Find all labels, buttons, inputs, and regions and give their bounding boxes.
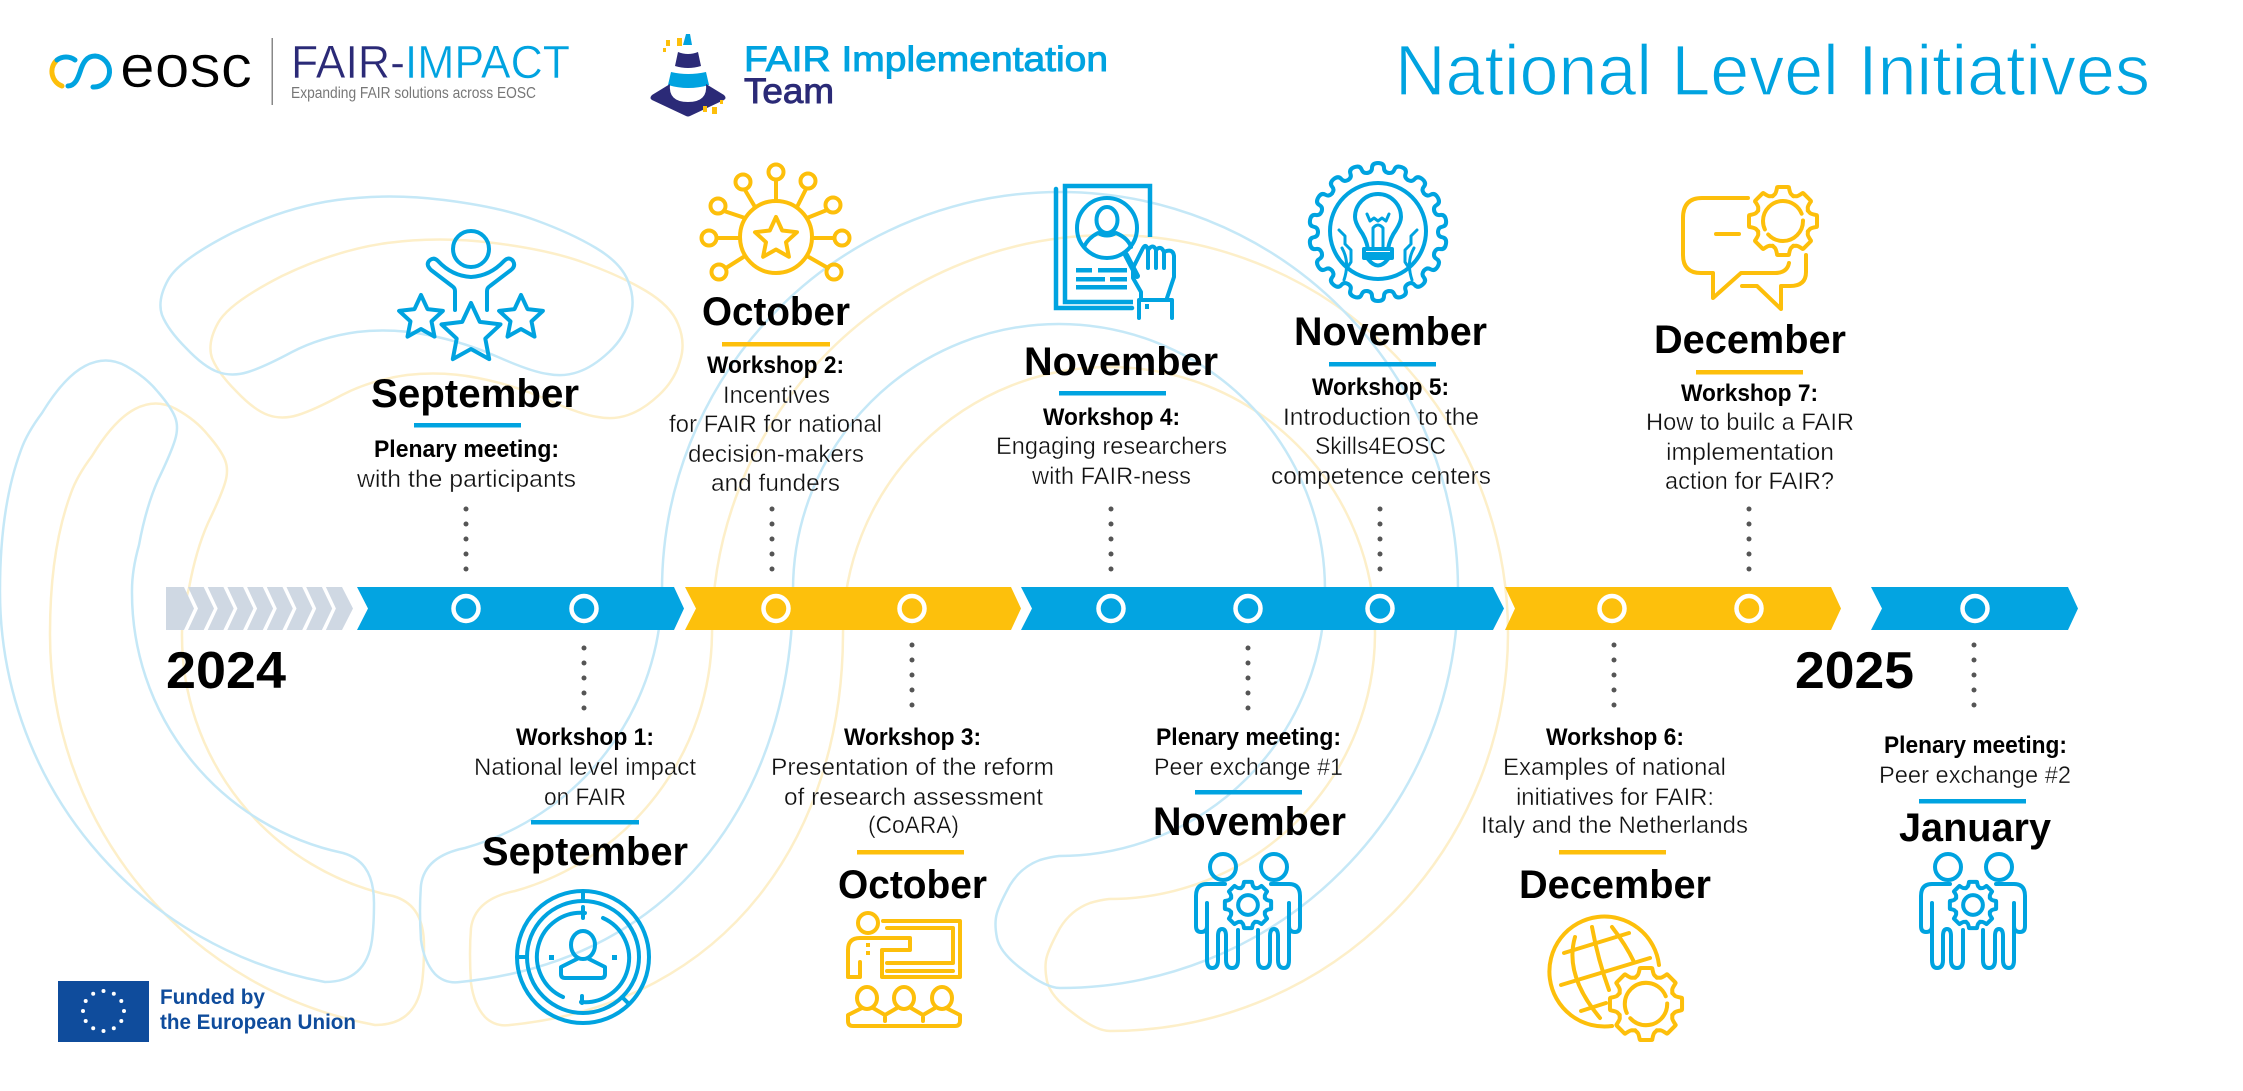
description: for FAIR for national [669, 411, 882, 438]
icon: profile document with hand [1056, 186, 1174, 318]
underline [531, 820, 639, 824]
heading: September: September [482, 830, 688, 874]
label: Workshop 7: [1681, 380, 1818, 407]
underline [1195, 790, 1302, 794]
label: Workshop 6: [1546, 724, 1684, 751]
connector dots [1108, 506, 1114, 572]
description: Examples of national [1503, 754, 1726, 781]
heading: FAIR Implementation: FAIR Implementation [744, 40, 1108, 79]
connector dots [1246, 646, 1250, 710]
underline [722, 342, 830, 346]
underline [1059, 391, 1166, 396]
description: implementation [1666, 439, 1834, 466]
icon: target person [517, 891, 649, 1023]
connector dots [582, 646, 586, 710]
milestone markers [454, 596, 1988, 621]
description: Presentation of the reform [771, 754, 1054, 781]
description: action for FAIR? [1665, 468, 1834, 495]
connector dots [1972, 642, 1976, 708]
wordmark: eosc: eosc [120, 33, 252, 100]
logo: FAIR Implementation Team [650, 34, 1108, 116]
description: of research assessment [784, 784, 1043, 811]
panel: Workshop 1, September [474, 646, 696, 1023]
description [996, 433, 1227, 490]
heading: Team: Team [744, 72, 834, 111]
divider between logos [272, 38, 273, 105]
logo: EOSC [52, 33, 252, 100]
segment: September [357, 587, 684, 630]
description: Incentives [723, 382, 830, 409]
panel: Workshop 7, December [1646, 187, 1854, 572]
description [474, 754, 696, 811]
description [669, 382, 882, 497]
segment: October [685, 587, 1021, 630]
icon: two people with gear [1196, 854, 1300, 968]
description: Skills4EOSC [1315, 433, 1446, 460]
year: 2025: 2025 [1795, 642, 1914, 700]
panel: Workshop 2, October [669, 164, 882, 572]
description: Peer exchange #1 [1154, 754, 1343, 781]
description: Introduction to the [1283, 404, 1479, 431]
description: competence centers [1271, 463, 1491, 490]
panel: Plenary meeting, January [1879, 642, 2071, 968]
icon: star hub [702, 164, 850, 280]
description: How to builc a FAIR [1646, 409, 1854, 436]
label: Workshop 4: [1043, 404, 1180, 431]
connector dots [1378, 506, 1382, 572]
segment: November [1021, 587, 1504, 630]
underline [414, 423, 521, 428]
description: with FAIR-ness [1031, 463, 1191, 490]
underline [1696, 370, 1803, 374]
wordmark: FAIR-IMPACT: FAIR-IMPACT [291, 36, 570, 88]
icon: chat bubbles with gear [1683, 187, 1817, 309]
icon: person with stars [399, 231, 543, 359]
panel: September plenary meeting [356, 231, 579, 572]
heading: October: October [838, 863, 987, 907]
title: National Level Initiatives [1395, 32, 2150, 111]
timeline bar [166, 587, 2078, 630]
panel: Workshop 6, December [1481, 642, 1748, 1040]
connector dots [464, 506, 468, 572]
label: Plenary meeting: [1156, 724, 1341, 751]
description: Peer exchange #2 [1879, 762, 2071, 789]
icon: two people with gear [1921, 854, 2025, 968]
description [1271, 404, 1491, 490]
heading: November: November [1153, 800, 1346, 844]
label: Workshop 3: [844, 724, 981, 751]
panel: Workshop 4, November [996, 186, 1227, 572]
label: Workshop 1: [516, 724, 654, 751]
label: Plenary meeting: [1884, 732, 2067, 759]
text: Funded by: Funded by [160, 986, 265, 1009]
heading: January: January [1899, 806, 2052, 850]
description: and funders [711, 470, 840, 497]
icon: EU flag [58, 981, 149, 1042]
underline [857, 850, 964, 854]
description: (CoARA) [868, 812, 959, 839]
icon: traffic cone [650, 34, 726, 116]
gray chevrons: lead-in [166, 587, 353, 630]
label: Workshop 2: [707, 352, 844, 379]
underline [1329, 362, 1436, 366]
underline [1919, 799, 2026, 804]
label: Plenary meeting: [374, 436, 559, 463]
heading: September: September [371, 372, 579, 416]
icon: presenter and audience [848, 913, 960, 1026]
connector dots [1612, 642, 1616, 708]
underline [1559, 850, 1666, 854]
connector dots [770, 506, 774, 572]
icon: globe with gear [1549, 917, 1682, 1040]
description [1481, 754, 1748, 839]
segment: January [1871, 587, 2078, 630]
icon: light bulb in gear [1308, 163, 1448, 301]
description: initiatives for FAIR: [1516, 784, 1714, 811]
heading: November: November [1024, 340, 1218, 384]
logo: FAIR-IMPACT [291, 36, 570, 102]
description [771, 754, 1054, 839]
tagline: Expanding FAIR solutions across EOSC [291, 85, 536, 102]
connector dots [910, 642, 914, 708]
heading: December: December [1654, 318, 1846, 362]
description: with the participants [356, 466, 576, 493]
panel: Workshop 3, October [771, 642, 1054, 1026]
description: decision-makers [688, 441, 864, 468]
panel: Plenary meeting, November [1153, 646, 1346, 968]
description [1646, 409, 1854, 495]
description: Engaging researchers [996, 433, 1227, 460]
description: Italy and the Netherlands [1481, 812, 1748, 839]
segment: December [1505, 587, 1841, 630]
funding notice: EU [58, 981, 356, 1042]
description: National level impact [474, 754, 696, 781]
year: 2024: 2024 [166, 642, 286, 700]
icon: EOSC rings [52, 56, 110, 87]
background: ribbon curves [0, 192, 1508, 1031]
text: the European Union: the European Union [160, 1011, 356, 1034]
heading: December: December [1519, 863, 1711, 907]
description: on FAIR [544, 784, 626, 811]
panel: Workshop 5, November [1271, 163, 1491, 572]
connector dots [1746, 506, 1752, 572]
label: Workshop 5: [1312, 374, 1449, 401]
heading: October: October [702, 290, 850, 334]
heading: November: November [1294, 310, 1487, 354]
